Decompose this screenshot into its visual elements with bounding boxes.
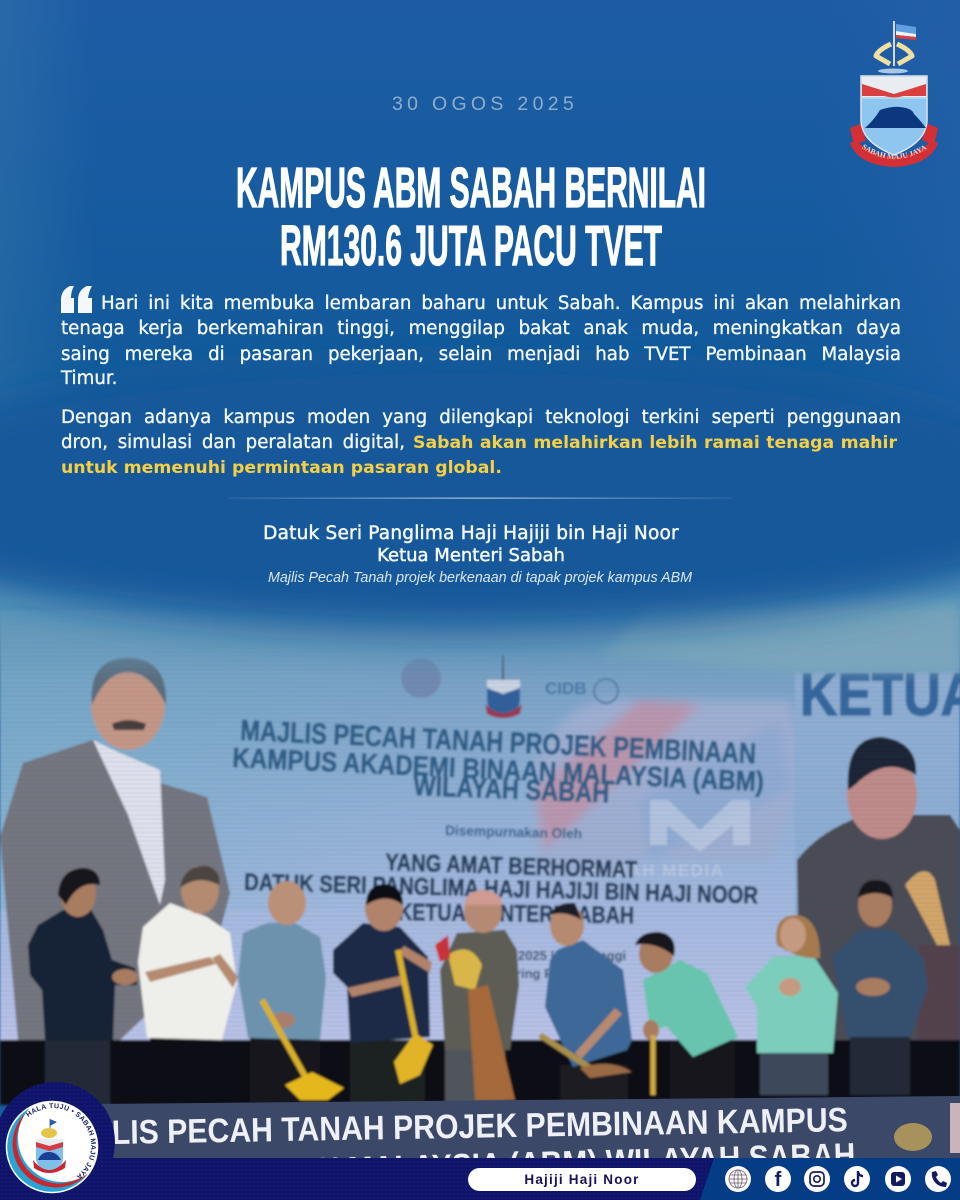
watermark	[588, 800, 750, 880]
Sabah crest	[850, 21, 938, 167]
screen logos	[401, 655, 618, 718]
person 4	[333, 884, 432, 1105]
quote text: saing mereka di pasaran pekerjaan, selain menjadi hab TVET Pembinaan Malaysia	[61, 344, 901, 365]
person 7	[635, 932, 738, 1105]
icon: instagram	[804, 1166, 830, 1192]
name pill: Hajiji Haji Noor	[524, 1172, 640, 1187]
attribution	[263, 523, 692, 586]
speaker name: Datuk Seri Panglima Haji Hajiji bin Haji Noor	[263, 523, 679, 544]
person 2	[138, 866, 238, 1105]
golden shovels and soil	[262, 935, 653, 1100]
screen text: YANG AMAT BERHORMAT	[385, 849, 638, 884]
screen text: WILAYAH SABAH	[413, 770, 610, 809]
date: 30 OGOS 2025	[392, 93, 578, 115]
screen text: 2025 | Jam Tinggi	[518, 948, 626, 963]
hala tuju round logo	[0, 1082, 115, 1194]
name pill	[468, 1168, 696, 1191]
icon: tiktok	[844, 1166, 870, 1192]
red ribbon	[850, 124, 938, 167]
person 5	[440, 890, 519, 1105]
icon: phone	[925, 1166, 951, 1192]
icon: video	[885, 1166, 911, 1192]
bottom banner	[95, 1096, 960, 1195]
ring lettering: HALA TUJU • SABAH MAJU JAYA	[26, 1103, 96, 1178]
bottom banner: ADEMI BINAAN MALAYSIA (ABM) WILAYAH SABAH	[117, 1136, 856, 1195]
small crest	[33, 1119, 66, 1173]
scan lines	[0, 610, 960, 1045]
stage	[0, 1040, 960, 1105]
screen text: Disempurnakan Oleh	[445, 822, 582, 842]
screen logos: CIDB	[545, 679, 587, 698]
bottom banner: LIS PECAH TANAH PROJEK PEMBINAAN KAMPUS	[111, 1101, 848, 1152]
person 8	[745, 915, 838, 1095]
person 3	[238, 881, 326, 1105]
screen text: Sering Parlimen	[500, 966, 599, 981]
red ribbon: SABAH MAJU JAYA	[862, 144, 927, 160]
speaker role: Ketua Menteri Sabah	[377, 545, 565, 566]
quote text: dron, simulasi dan peralatan digital,	[61, 432, 405, 453]
social icons	[725, 1166, 951, 1192]
people on stage	[28, 866, 928, 1105]
icon: website globe	[725, 1166, 751, 1192]
flag and pole	[894, 21, 916, 66]
screen text: MAJLIS PECAH TANAH PROJEK PEMBINAAN	[240, 715, 757, 770]
person 1	[28, 868, 138, 1105]
quote text	[60, 293, 901, 478]
footer bar	[0, 1158, 960, 1200]
LED screen	[0, 610, 960, 1045]
screen graphic	[535, 699, 799, 878]
quote text: untuk memenuhi permintaan pasaran global.	[61, 458, 502, 478]
arms	[876, 44, 912, 64]
shield	[861, 76, 927, 155]
event note: Majlis Pecah Tanah projek berkenaan di tapak projek kampus ABM	[268, 570, 692, 586]
right screen	[795, 661, 960, 1042]
person 9	[832, 880, 928, 1095]
watermark: SABAH MEDIA	[588, 861, 724, 880]
quote text: tenaga kerja berkemahiran tinggi, menggilap bakat anak muda, meningkatkan daya	[61, 318, 901, 339]
divider	[228, 498, 732, 499]
event photo	[0, 610, 960, 1105]
quote text: Sabah akan melahirkan lebih ramai tenaga mahir	[413, 433, 897, 453]
screen text: KAMPUS AKADEMI BINAAN MALAYSIA (ABM)	[232, 742, 765, 797]
quote text: Timur.	[61, 368, 117, 389]
quote text: Dengan adanya kampus moden yang dilengkapi teknologi terkini seperti penggunaan	[61, 407, 901, 428]
quote mark	[61, 286, 92, 313]
person 6	[545, 903, 632, 1105]
icon: facebook: f	[775, 1169, 782, 1191]
screen text: KETUA MENTERI SABAH	[398, 899, 634, 929]
icon: facebook	[765, 1166, 791, 1192]
screen text: DATUK SERI PANGLIMA HAJI HAJIJI BIN HAJI NOOR	[244, 869, 758, 909]
screen text	[232, 715, 765, 981]
top fade over photo	[0, 360, 960, 680]
title	[236, 156, 706, 278]
quote text: Hari ini kita membuka lembaran baharu untuk Sabah. Kampus ini akan melahirkan	[101, 293, 901, 314]
big portrait	[0, 658, 230, 1040]
